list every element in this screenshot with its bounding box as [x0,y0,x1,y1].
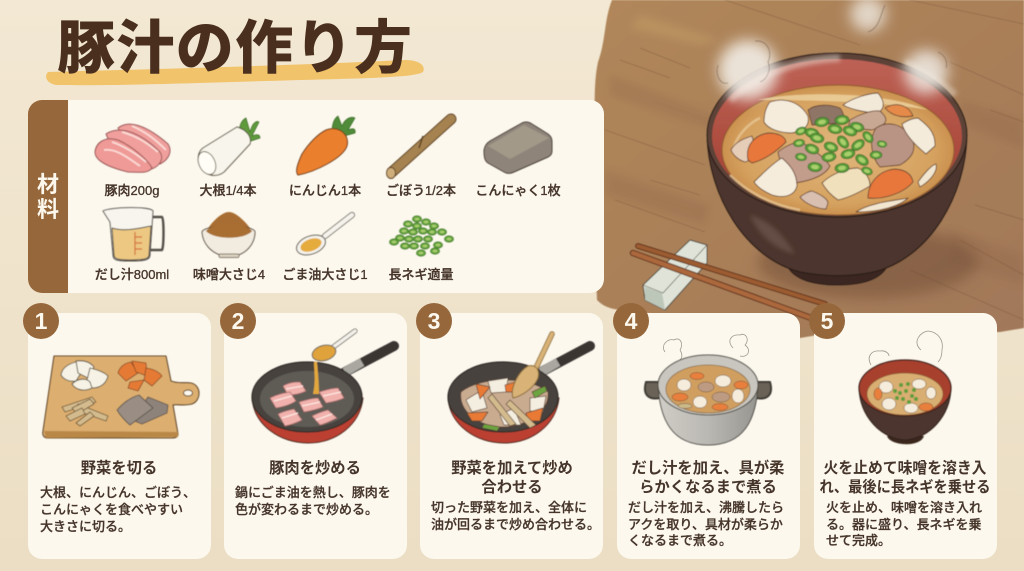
card background [224,313,407,559]
step title: 火を止めて味噌を溶き入 [824,460,986,477]
number badge 4 [613,303,649,339]
label: konnyaku: こんにゃく1枚 [475,183,561,198]
icon: measuring cup of dashi [103,208,164,261]
card background [814,313,997,559]
step 2 card [220,303,407,559]
step title [820,460,990,496]
icon: frying pan with vegetables [448,334,590,443]
number badge 4: 4 [625,308,638,334]
number badge 1 [23,303,59,339]
title brush underline [46,60,424,85]
number badge 2 [220,303,256,339]
step description: 油が回るまで炒め合わせる。 [431,517,600,532]
step description [431,500,600,532]
step title [451,460,573,496]
title text: 豚汁の作り方 [57,16,412,81]
step description: アクを取り、具材が柔らか [628,517,783,532]
step description: 色が変わるまで炒める。 [235,502,378,517]
title [46,16,424,85]
icon: steam [663,334,749,360]
icon: miso bowl [202,212,255,258]
step description: 鍋にごま油を熱し、豚肉を [235,485,391,500]
card background [617,313,800,559]
step description: だし汁を加え、沸騰したら [628,500,784,515]
step title: だし汁を加え、具が柔 [632,459,784,477]
soup ingredients [731,93,936,212]
label: carrot: にんじん1本 [289,183,361,198]
step title: 豚肉を炒める [269,460,361,477]
number badge 5: 5 [821,308,834,334]
step description: 大きさに切る。 [40,519,131,534]
icon: konnyaku [484,122,552,174]
icon: pork slices [95,124,170,172]
step title: 野菜を切る [81,460,157,477]
bowl foot [786,262,889,285]
ingredients label strip: 材 [37,172,59,197]
step description: くなるまで煮る。 [628,533,732,548]
number badge 5 [809,303,845,339]
card background [28,313,211,559]
soup [722,85,954,215]
label: pork: 豚肉200g [105,183,159,198]
label: miso: 味噌大さじ4 [193,267,265,282]
label: daikon: 大根1/4本 [199,183,257,198]
icon: spoon of sesame oil [294,215,352,259]
step description [826,500,982,548]
number badge 1: 1 [35,308,48,334]
wood grain [605,0,1024,320]
step 5 card [809,303,997,559]
panel background [28,100,604,293]
steam [717,0,955,100]
step 4 card [613,303,800,559]
icon: frying pan with pork [252,331,394,443]
label: sesame oil: ごま油大さじ1 [282,267,368,282]
step description: せて完成。 [826,533,891,548]
icon: steam [869,331,942,365]
step description: 切った野菜を加え、全体に [431,500,587,515]
step description [235,485,391,517]
step description: こんにゃくを食べやすい [40,502,183,517]
step title [632,459,784,496]
step description: 大根、にんじん、ごぼう、 [40,485,196,500]
icon: bowl of tonjiru [859,360,951,444]
panel: ingredients [28,100,604,293]
icon: chopped green onion [389,216,454,256]
ingredients label strip [28,100,68,293]
number badge 3: 3 [428,308,440,334]
card background [420,313,603,559]
icon: burdock root [386,119,451,178]
bowl body [707,135,967,276]
chopsticks [633,246,825,322]
step 1 card [23,303,211,559]
green onion topping [793,115,887,176]
ingredients label strip: 料 [37,197,59,222]
step title: 合わせる [481,479,543,496]
step title: 野菜を加えて炒め [451,460,573,477]
number badge 3 [416,303,452,339]
icon: daikon [195,118,260,177]
photo: wooden table with tonjiru bowl [592,0,1024,338]
label: burdock: ごぼう1/2本 [386,183,456,198]
step description [40,485,196,534]
wooden table [592,0,1024,338]
step description [628,500,784,548]
step title: らかくなるまで煮る [639,479,777,496]
icon: cutting board [43,356,199,438]
step description: る。器に盛り、長ネギを乗 [826,517,981,532]
icon: pot of soup [645,355,771,445]
label: green onion: 長ネギ適量 [388,267,454,282]
tonjiru bowl [707,53,967,285]
bowl shadow [758,226,978,298]
icon: carrot [297,116,355,175]
number badge 2: 2 [232,308,244,334]
step 3 card [416,303,603,559]
step description: 火を止め、味噌を溶き入れ [826,500,982,515]
step title: れ、最後に長ネギを乗せる [820,478,990,496]
chopstick rest [643,240,707,310]
label: dashi: だし汁800ml [95,267,169,282]
bowl rim and red interior [707,53,967,217]
